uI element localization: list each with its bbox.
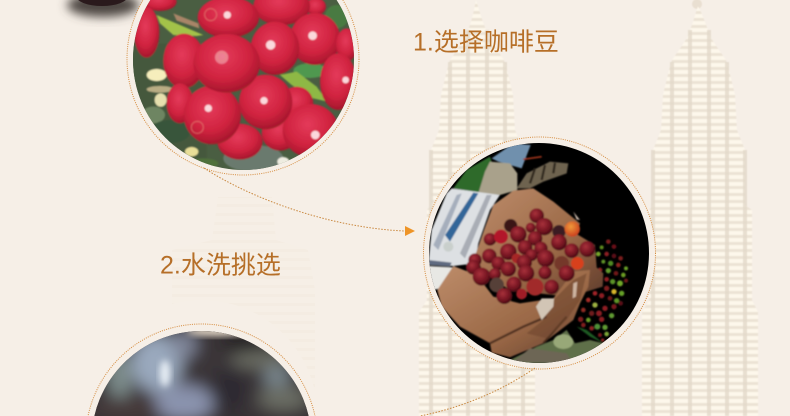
lower hand	[437, 266, 590, 357]
heading: step 1: 1.选择咖啡豆	[413, 28, 559, 56]
photo ring backing: cherries	[127, 0, 359, 175]
left tower	[419, 0, 535, 416]
cherries	[143, 0, 177, 11]
faint tower behind step 2	[172, 197, 315, 416]
right tower	[642, 0, 758, 416]
photo ring: hands	[424, 137, 656, 369]
foliage and highlights	[130, 5, 348, 172]
stems	[157, 15, 203, 36]
upper hand	[476, 188, 603, 297]
arrow: hands photo to next step	[420, 368, 535, 416]
shirt sleeve	[428, 188, 500, 266]
arrow: step 1 photo to hands photo	[204, 168, 415, 236]
photo ring: steam	[86, 324, 318, 416]
photo ring backing: steam	[86, 300, 318, 416]
heading: step 2: 2.水洗挑选	[160, 252, 281, 280]
cupped cherries	[466, 208, 595, 304]
coffee bean with shadow, top left	[67, 0, 139, 17]
leaves and glove	[453, 143, 603, 363]
photo ring: cherries	[127, 0, 359, 175]
photo ring backing: hands	[424, 137, 656, 369]
photo: steam during washing	[94, 331, 309, 416]
thumbnail	[536, 298, 554, 320]
highlights	[205, 11, 349, 139]
small green and red cherries	[578, 239, 628, 342]
photo: red coffee cherries	[130, 0, 360, 175]
photo: hands holding coffee cherries	[425, 140, 655, 370]
